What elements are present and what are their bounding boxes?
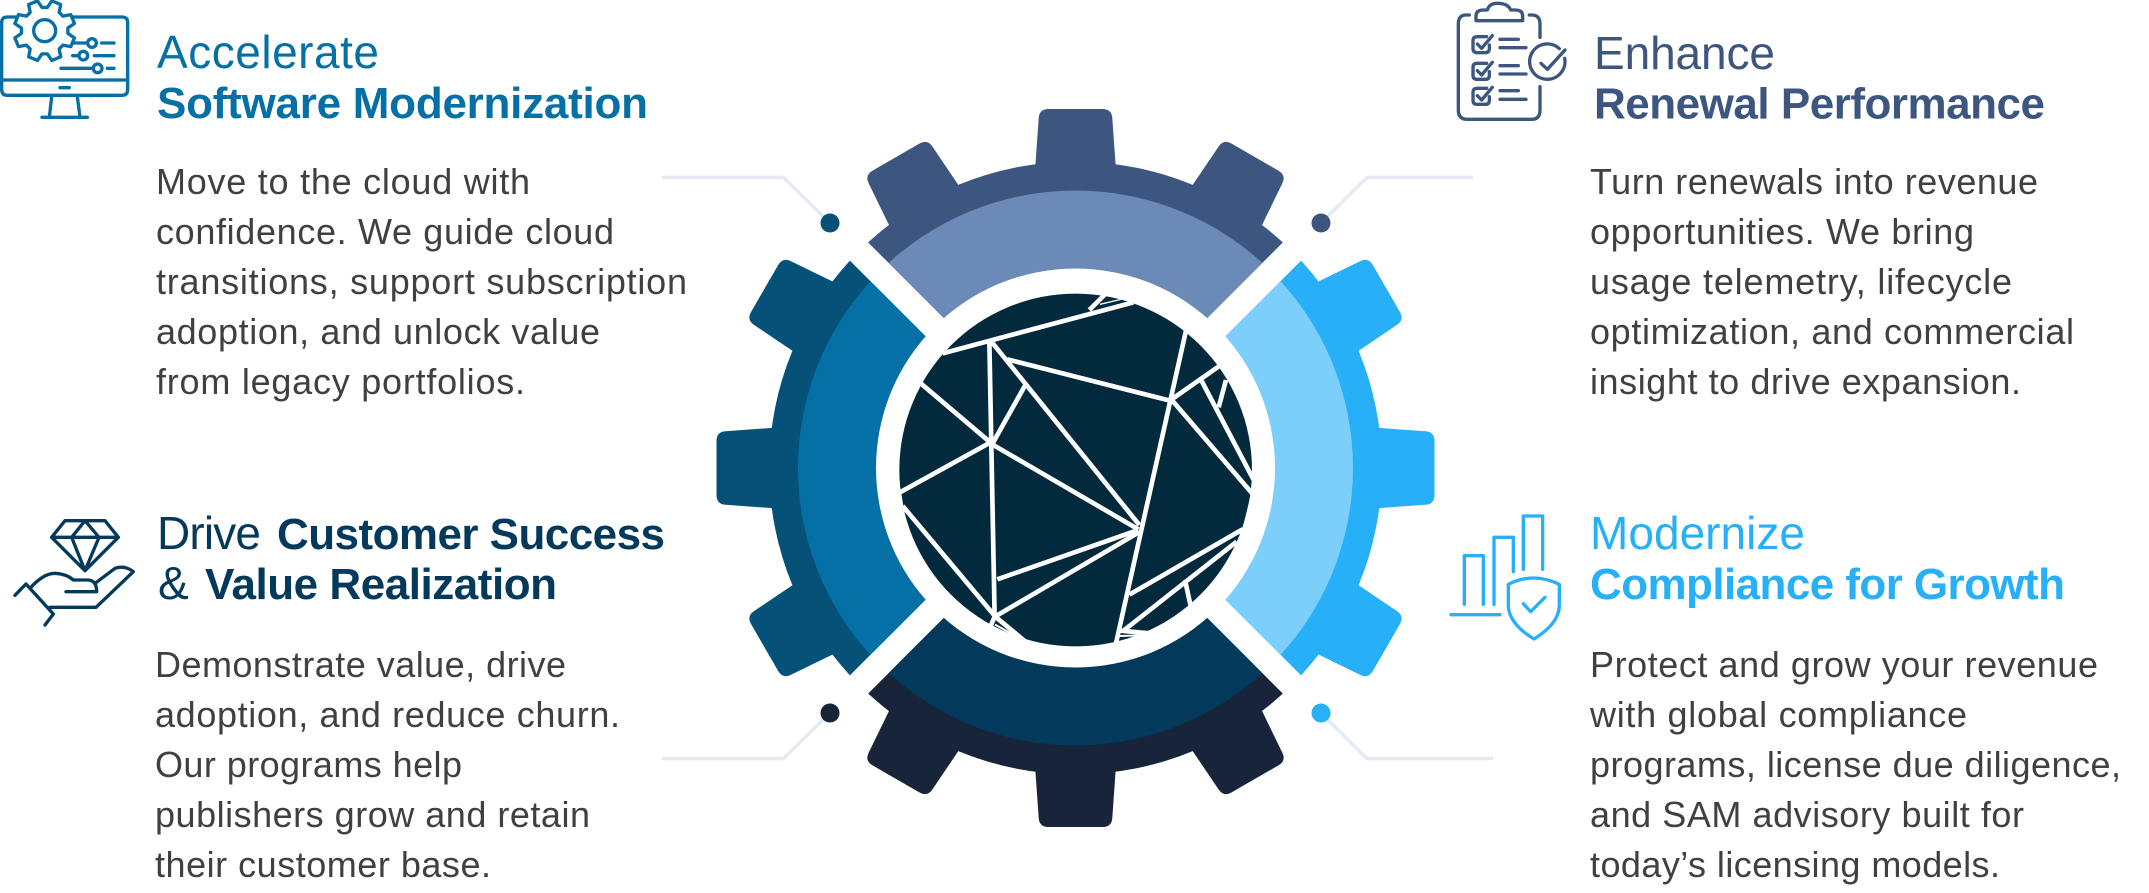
gear segment: left — [716, 260, 926, 676]
heading: Accelerate — [157, 26, 379, 78]
icon: hand holding diamond — [15, 521, 133, 625]
connector: top left — [662, 178, 830, 223]
connector dot: bottom left — [820, 704, 840, 722]
panel: customer success and value realization — [15, 507, 665, 885]
body text: their customer base. — [155, 844, 491, 885]
body text: with global compliance — [1589, 694, 1967, 735]
connector dot: top right — [1312, 214, 1330, 232]
gear segment: top — [867, 109, 1284, 318]
body text: Turn renewals into revenue — [1590, 161, 2038, 202]
panel: accelerate software modernization — [2, 1, 687, 402]
body text: publishers grow and retain — [155, 794, 590, 835]
connector: bottom right — [1321, 713, 1493, 758]
panel: modernize compliance for growth — [1451, 507, 2121, 885]
body text: optimization, and commercial — [1590, 311, 2074, 352]
body text: today’s licensing models. — [1590, 844, 2000, 885]
body text: from legacy portfolios. — [156, 361, 525, 402]
panel: enhance renewal performance — [1458, 3, 2074, 402]
body text — [1590, 161, 2074, 402]
heading: Customer Success — [277, 510, 665, 559]
gear segment: right — [1225, 260, 1434, 676]
body text: and SAM advisory built for — [1590, 794, 2024, 835]
body text: Protect and grow your revenue — [1590, 644, 2098, 685]
heading: & — [158, 557, 189, 609]
body text: opportunities. We bring — [1590, 211, 1974, 252]
body text: adoption, and reduce churn. — [155, 694, 620, 735]
body text — [156, 161, 687, 402]
heading — [157, 26, 648, 128]
body text — [155, 644, 620, 885]
connector dot: bottom right — [1312, 704, 1330, 722]
body text: confidence. We guide cloud — [156, 211, 614, 252]
heading: Drive — [157, 507, 261, 559]
heading: Renewal Performance — [1594, 80, 2045, 128]
body text: adoption, and unlock value — [156, 311, 600, 352]
heading: Compliance for Growth — [1590, 560, 2065, 609]
gear segment: bottom — [867, 618, 1284, 827]
body text: Move to the cloud with — [156, 161, 530, 202]
body text: transitions, support subscription — [156, 261, 687, 302]
heading: Software Modernization — [157, 79, 648, 128]
body text — [1589, 644, 2121, 885]
icon: monitor with gear — [2, 1, 128, 117]
heading — [1594, 27, 2045, 128]
body text: insight to drive expansion. — [1590, 361, 2021, 402]
body text: Our programs help — [155, 744, 462, 785]
body text: usage telemetry, lifecycle — [1590, 261, 2012, 302]
connector: bottom left — [662, 713, 830, 758]
icon: bar chart with shield — [1451, 516, 1559, 639]
heading: Value Realization — [205, 560, 557, 609]
body text: Demonstrate value, drive — [155, 644, 566, 685]
heading — [1590, 507, 2065, 609]
heading: Enhance — [1594, 27, 1775, 79]
connector dot: top left — [820, 214, 840, 232]
heading — [157, 507, 665, 609]
faceted globe — [893, 294, 1260, 646]
connector: top right — [1321, 178, 1473, 223]
body text: programs, license due diligence, — [1590, 744, 2121, 785]
central gear — [716, 109, 1434, 827]
icon: clipboard checklist — [1458, 3, 1565, 119]
heading: Modernize — [1590, 507, 1805, 559]
